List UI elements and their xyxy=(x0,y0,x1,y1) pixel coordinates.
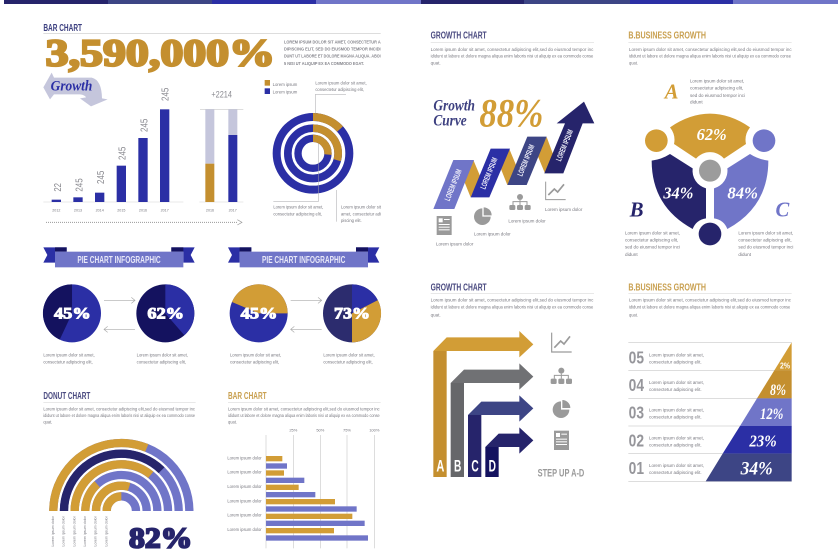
stepped triangle: 8% xyxy=(770,382,786,399)
arrow A: A xyxy=(436,457,444,476)
letters A B C: A xyxy=(663,81,679,103)
icon captions: Lorem ipsum dolor xyxy=(436,242,474,247)
row text: Lorem ipsum dolor sit amet, xyxy=(649,435,704,440)
heading: business growth: B.BUSINESS GROWTH xyxy=(628,31,706,42)
top colour strip xyxy=(4,0,838,4)
ribbon right: PIE CHART INFOGRAPHIC xyxy=(262,255,345,266)
zigzag arrow xyxy=(433,102,594,209)
caps paragraph xyxy=(284,39,381,66)
step description: quat. xyxy=(431,312,441,317)
ring labels: Lorem ipsum dolor xyxy=(62,515,66,546)
pie 45% gold: 45% xyxy=(241,305,277,322)
stepped triangle: 34% xyxy=(740,458,773,479)
ring labels xyxy=(51,515,108,546)
arrow C: C xyxy=(471,457,479,476)
callouts: Lorem ipsum dolor sit amet, xyxy=(690,79,744,84)
callouts xyxy=(625,79,793,257)
stepped triangle: 2% xyxy=(780,360,790,370)
pie captions: Lorem ipsum dolor sit amet, xyxy=(323,353,375,358)
donut callouts: consectetur adipiscing elit, xyxy=(315,87,364,92)
panel: donut chart xyxy=(43,391,381,555)
arrow A xyxy=(433,331,533,477)
callouts: consectetur adipiscing elit, xyxy=(690,86,743,91)
three part shield: 34% xyxy=(662,183,693,202)
pie 62%: 62% xyxy=(147,305,184,322)
yearly bar chart: 2016 xyxy=(139,209,147,213)
ring labels: Lorem ipsum dolor xyxy=(94,515,98,546)
horizontal bar chart: Lorem ipsum dolor xyxy=(227,484,262,489)
ribbon right xyxy=(228,247,379,267)
growth description xyxy=(431,47,594,66)
stepped triangle: 12% xyxy=(760,406,783,423)
letters A B C: B xyxy=(629,200,644,222)
panel: growth curve xyxy=(431,31,594,247)
icon: document xyxy=(437,216,452,235)
ring labels: Lorem ipsum dolor xyxy=(104,515,108,546)
business description: quat. xyxy=(629,61,638,66)
yearly bar chart: 2013 xyxy=(74,209,82,213)
row text: Lorem ipsum dolor sit amet, xyxy=(649,352,704,357)
donut description xyxy=(43,407,196,425)
zigzag arrow: LOREM IPSUM xyxy=(554,128,575,163)
row rules xyxy=(628,342,792,482)
growth arrow badge: Growth xyxy=(51,79,92,95)
row numbers: 01 xyxy=(629,458,644,478)
callouts: didunt xyxy=(738,252,752,257)
panel: step up arrows xyxy=(431,283,594,480)
pie 45% xyxy=(43,284,101,342)
caps paragraph: 5 NISI UT ALIQUIP EX EA COMMODO EGAT. xyxy=(284,61,364,66)
pie captions: consectetur adipiscing elit, xyxy=(323,359,373,364)
icon: pie xyxy=(474,207,492,225)
panel: business growth A B C xyxy=(625,31,793,257)
horizontal bar chart: 75% xyxy=(343,427,351,432)
zigzag arrow: LOREM IPSUM xyxy=(479,156,500,191)
horizontal bar chart: Lorem ipsum dolor xyxy=(227,527,262,532)
row numbers xyxy=(629,347,644,478)
panel: pie charts xyxy=(43,247,381,364)
yearly bar chart: 2017 xyxy=(161,209,169,213)
three part shield: 84% xyxy=(727,183,758,202)
88% figure: 88% xyxy=(479,91,543,136)
82% figure: 82% xyxy=(129,523,192,555)
business description: Lorem ipsum dolor sit amet, consectetur adipiscing elit,sed do eiusmod tempor inc xyxy=(629,47,793,52)
yearly bar chart: 2012 xyxy=(52,209,60,213)
donut description: Lorem ipsum dolor sit amet, consectetur adipiscing elit,sed do eiusmod tempor inc xyxy=(43,407,196,412)
horizontal bar chart: Lorem ipsum dolor xyxy=(227,455,262,460)
growth curve title: Curve xyxy=(433,113,467,130)
icon: org chart xyxy=(509,194,531,210)
caps paragraph: DIPISCING ELIT, SED DO EIUSMOD TEMPOR INCIDI xyxy=(284,46,381,51)
donut callouts: piscing elit. xyxy=(341,218,362,223)
step description: ididunt ut labore et dolore magna aliqua enim laboris nisi ut aliquip ex ea commodo conse xyxy=(431,305,594,310)
callouts: consectetur adipiscing elit, xyxy=(625,238,678,243)
pie 73%: 73% xyxy=(334,305,370,322)
donut callouts: amet, consectetur adi xyxy=(341,211,381,216)
pyramid description xyxy=(629,298,792,317)
stacked bars: 2016 xyxy=(206,209,214,213)
caps paragraph: DUNT UT LABORE ET DOLORE MAGNA ALIQUA. ABOI xyxy=(284,54,381,59)
icon: line chart xyxy=(552,333,572,352)
callouts: didunt xyxy=(690,100,704,105)
heading: growth chart: GROWTH CHART xyxy=(431,31,487,42)
pie 62% xyxy=(136,284,194,342)
growth description: ididunt ut labore et dolore magna aliqua enim laboris nisi ut aliquip ex ea commodo conse xyxy=(431,54,594,59)
pyramid description: quat. xyxy=(629,312,638,317)
pie 73% xyxy=(323,284,381,342)
row text xyxy=(649,352,704,475)
heading: bar chart gold: BAR CHART xyxy=(228,391,267,402)
growth curve title: Growth xyxy=(433,98,475,115)
yearly bar chart: 22 xyxy=(53,183,64,192)
arrow D xyxy=(485,427,533,477)
row text: consectetur adipiscing elit. xyxy=(649,359,702,364)
pie captions: Lorem ipsum dolor sit amet, xyxy=(43,353,95,358)
row numbers: 05 xyxy=(629,347,644,367)
donut description: ididunt ut labore et dolore magna aliqua enim laboris nisi ut aliquip ex ea commodo conse xyxy=(43,413,196,418)
arrow B xyxy=(451,363,533,477)
ring labels: Lorem ipsum dolor xyxy=(83,515,87,546)
heading: bar chart: BAR CHART xyxy=(43,23,82,34)
growth curve title xyxy=(433,98,475,130)
exchange arrows xyxy=(104,297,322,332)
row text: Lorem ipsum dolor sit amet, xyxy=(649,408,704,413)
row text: consectetur adipiscing elit. xyxy=(649,470,702,475)
three part shield: 62% xyxy=(697,125,727,144)
icon captions: Lorem ipsum dolor xyxy=(474,231,511,236)
horizontal bar chart: 100% xyxy=(369,427,380,432)
pie captions: Lorem ipsum dolor sit amet, xyxy=(230,353,281,358)
pie captions: Lorem ipsum dolor sit amet, xyxy=(137,353,188,358)
heading: business growth: B.BUSINESS GROWTH xyxy=(628,283,706,294)
concentric donut chart xyxy=(273,94,349,222)
arrow B: B xyxy=(454,457,461,476)
growth arrow badge xyxy=(43,73,108,106)
callouts: sed do eiusmod tempor inci xyxy=(738,245,793,250)
bar chart description: quat. xyxy=(228,420,237,425)
donut description: quat. xyxy=(43,420,52,425)
stacked bars xyxy=(199,90,243,213)
heading: growth chart: GROWTH CHART xyxy=(431,283,487,294)
icon captions xyxy=(436,207,583,247)
bar chart description: ididunt ut labore et dolore magna aliqua enim laboris nisi ut aliquip ex ea commodo conse xyxy=(228,413,380,418)
legend xyxy=(265,80,298,95)
arrow D: D xyxy=(489,457,496,476)
icon: line chart xyxy=(546,182,566,200)
horizontal bar chart: 50% xyxy=(316,427,325,432)
panel: bar chart overview xyxy=(43,23,382,225)
legend: Lorem ipsum xyxy=(273,90,298,95)
callouts: Lorem ipsum dolor sit amet, xyxy=(625,231,680,236)
icon: org chart xyxy=(551,368,572,384)
arrow C xyxy=(468,395,533,477)
business description: ididunt ut labore et dolore magna aliqua enim laboris nisi ut aliquip ex ea commodo conse xyxy=(629,54,792,59)
ring labels: Lorem ipsum dolor xyxy=(72,515,76,546)
letters A B C xyxy=(629,81,789,222)
stacked bars: +2214 xyxy=(211,90,232,100)
row text: consectetur adipiscing elit. xyxy=(649,442,702,447)
stacked bars: 2017 xyxy=(229,209,237,213)
step up caption: STEP UP A-D xyxy=(538,468,584,480)
pie captions: consectetur adipiscing elit, xyxy=(230,359,279,364)
growth description: Lorem ipsum dolor sit amet, consectetur adipiscing elit,sed do eiusmod tempor inc xyxy=(431,47,594,52)
three part shield xyxy=(645,114,775,245)
step description: Lorem ipsum dolor sit amet, consectetur adipiscing elit,sed do eiusmod tempor inc xyxy=(431,298,594,303)
heading: donut chart: DONUT CHART xyxy=(43,391,90,402)
donut callouts xyxy=(273,80,382,223)
big number: 3,590,000% xyxy=(46,33,275,75)
donut callouts: consectetur adipiscing elit, xyxy=(273,211,322,216)
yearly bar chart: 245 xyxy=(118,147,129,160)
pie captions: consectetur adipiscing elit, xyxy=(137,359,186,364)
bar chart description: Lorem ipsum dolor sit amet, consectetur adipiscing elit,sed do eiusmod tempor inc xyxy=(228,407,380,412)
yearly bar chart: 245 xyxy=(96,171,107,184)
pie captions: consectetur adipiscing elit, xyxy=(43,359,93,364)
donut callouts: Lorem ipsum dolor sit amet, xyxy=(315,80,367,85)
row text: consectetur adipiscing elit. xyxy=(649,387,702,392)
yearly bar chart xyxy=(43,88,183,213)
donut callouts: Lorem ipsum dolor sit amet, xyxy=(273,205,323,210)
horizontal bar chart: Lorem ipsum dolor xyxy=(227,498,262,503)
caps paragraph: LOREM IPSUM DOLOR SIT AMET, CONSECTETUR A xyxy=(284,39,381,44)
row numbers: 04 xyxy=(629,375,644,395)
pie captions xyxy=(43,353,375,364)
icon: document xyxy=(554,431,569,450)
stepped triangle: 23% xyxy=(748,432,777,451)
callouts: sed do eiusmod tempor inci xyxy=(690,93,745,98)
row text: Lorem ipsum dolor sit amet, xyxy=(649,380,704,385)
dotted timeline arrow xyxy=(46,220,242,225)
callouts: didunt xyxy=(625,252,639,257)
zigzag arrow: LOREM IPSUM xyxy=(516,143,537,178)
stepped triangle xyxy=(706,342,792,481)
yearly bar chart: 2015 xyxy=(117,209,125,213)
donut callouts: Lorem ipsum dolor sit xyxy=(341,205,382,210)
letters A B C: C xyxy=(775,200,789,222)
panel: business growth pyramid xyxy=(628,283,792,482)
yearly bar chart: 245 xyxy=(160,88,171,101)
yearly bar chart: 2014 xyxy=(96,209,104,213)
step description xyxy=(431,298,594,317)
callouts: consectetur adipiscing elit, xyxy=(738,238,792,243)
ring labels: Lorem ipsum dolor xyxy=(51,515,55,546)
row text: consectetur adipiscing elit. xyxy=(649,415,702,420)
icon: pie xyxy=(553,400,570,418)
pie 45% gold xyxy=(230,284,288,342)
yearly bar chart: 245 xyxy=(74,178,85,192)
yearly bar chart: 245 xyxy=(139,119,150,132)
ribbon left xyxy=(43,247,195,267)
row text: Lorem ipsum dolor sit amet, xyxy=(649,463,704,468)
horizontal bar chart: 25% xyxy=(289,427,298,432)
pyramid description: Lorem ipsum dolor sit amet, consectetur adipiscing elit,sed do eiusmod tempor inc xyxy=(629,298,792,303)
semicircle rings xyxy=(53,443,189,511)
horizontal bar chart: Lorem ipsum dolor xyxy=(227,470,262,475)
pie 45%: 45% xyxy=(54,305,91,322)
pyramid description: ididunt ut labore et dolore magna aliqua enim laboris nisi ut aliquip ex ea commodo conse xyxy=(629,305,791,310)
row numbers: 02 xyxy=(629,430,644,450)
growth description: quat. xyxy=(431,61,441,66)
legend: Lorem ipsum xyxy=(273,82,298,87)
business description xyxy=(629,47,793,66)
callouts: sed do eiusmod tempor inci xyxy=(625,245,680,250)
ribbon left: PIE CHART INFOGRAPHIC xyxy=(77,255,161,266)
icon captions: Lorem ipsum dolor xyxy=(508,219,546,224)
row numbers: 03 xyxy=(629,403,644,423)
icon captions: Lorem ipsum dolor xyxy=(545,207,583,212)
zigzag arrow: LOREM IPSUM xyxy=(443,168,464,202)
bar chart description xyxy=(228,407,380,425)
horizontal bar chart: Lorem ipsum dolor xyxy=(227,513,262,518)
horizontal bar chart xyxy=(227,427,380,548)
callouts: Lorem ipsum dolor sit amet, xyxy=(738,231,793,236)
